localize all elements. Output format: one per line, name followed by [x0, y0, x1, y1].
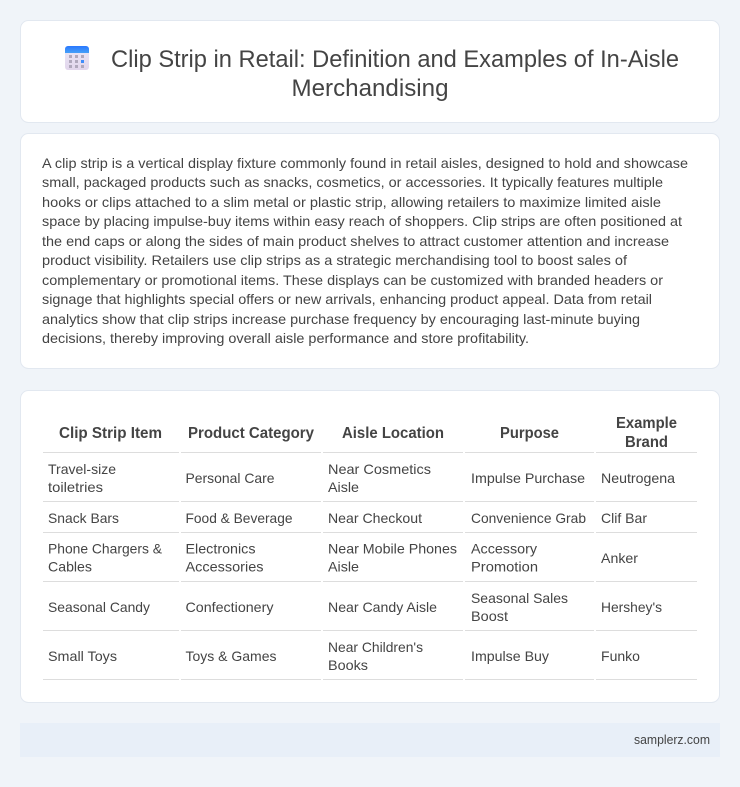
table row: seasonal candy: Confectionery [186, 599, 274, 615]
table row: small toys: Funko [601, 648, 640, 664]
table row: travel-size toiletries: Travel-size [48, 461, 116, 477]
table header row: Example [616, 415, 677, 432]
text block: description paragraph: analytics show that clip strips increase purchase frequency by encouraging last-minute buying [42, 311, 640, 327]
table row: travel-size toiletries: Impulse Purchase [471, 470, 585, 486]
footer text: samplerz.com [634, 733, 710, 747]
table row: seasonal candy: Boost [471, 608, 508, 624]
panel: title header [20, 20, 720, 122]
table row: seasonal candy: Hershey's [601, 599, 662, 615]
table row: small toys: Books [328, 657, 368, 673]
title [111, 46, 679, 102]
table row: phone chargers: Near Mobile Phones [328, 540, 457, 556]
table row: phone chargers: Electronics [186, 540, 256, 556]
text block: description paragraph: the end caps or along the sides of main product shelves to attract customer attention and increase [42, 233, 669, 249]
table row: snack bars: Food & Beverage [186, 510, 293, 526]
title: Clip Strip in Retail: Definition and Examples of In-Aisle [111, 46, 679, 73]
table row: small toys: Impulse Buy [471, 648, 549, 664]
table row: seasonal candy [48, 590, 662, 624]
table row: phone chargers: Cables [48, 558, 92, 574]
text block: description paragraph: decisions, thereby improving overall aisle performance and store profitability. [42, 330, 529, 346]
table row: seasonal candy: Near Candy Aisle [328, 599, 437, 615]
text block: description paragraph: product visibility. Retailers use clip strips as a strategic merchandising tool to boost sales of [42, 252, 627, 268]
table header row: Product Category [188, 425, 314, 442]
table row: phone chargers [48, 540, 638, 574]
table row: snack bars: Near Checkout [328, 510, 422, 526]
text block: description paragraph: space by placing impulse-buy items within easy reach of shoppers. Clip strips are often positioned at [42, 213, 682, 229]
table row: small toys: Near Children's [328, 639, 423, 655]
table row: phone chargers: Accessory [471, 540, 537, 556]
table row: phone chargers: Aisle [328, 558, 359, 574]
table row: phone chargers: Phone Chargers & [48, 540, 163, 556]
table header row: Purpose [500, 425, 559, 442]
table row: phone chargers: Accessories [186, 558, 264, 574]
table row: phone chargers: Promotion [471, 558, 538, 574]
table row: travel-size toiletries: toiletries [48, 479, 103, 495]
table row: small toys [48, 639, 640, 673]
table row: travel-size toiletries: Aisle [328, 479, 359, 495]
panel: table card [20, 390, 720, 702]
title: Merchandising [292, 75, 448, 102]
table row: small toys: Small Toys [48, 648, 117, 664]
table header row: Brand [625, 434, 668, 451]
footer bar [20, 723, 720, 757]
text block: description paragraph [42, 155, 688, 346]
table row: seasonal candy: Seasonal Candy [48, 599, 150, 615]
table row: small toys: Toys & Games [186, 648, 276, 664]
table row: snack bars [48, 510, 647, 526]
table header row: Aisle Location [342, 425, 444, 442]
text block: description paragraph: signage that highlights special offers or new arrivals, enhancing product appeal. Data from retail [42, 291, 652, 307]
panel: description [20, 134, 720, 368]
table row: travel-size toiletries: Near Cosmetics [328, 461, 431, 477]
text block: description paragraph: hooks or clips attached to a slim metal or plastic strip, allowing retailers to maximize limited aisle [42, 194, 661, 210]
icon: calendar [65, 46, 89, 70]
table header row: Clip Strip Item [59, 425, 162, 442]
text block: description paragraph: A clip strip is a vertical display fixture commonly found in retail aisles, designed to hold and showcase [42, 155, 688, 171]
table row: travel-size toiletries: Personal Care [186, 470, 275, 486]
table row: snack bars: Convenience Grab [471, 510, 586, 526]
text block: description paragraph: complementary or promotional items. These displays can be customized with branded headers or [42, 272, 663, 288]
table header row [59, 415, 677, 451]
table row: phone chargers: Anker [601, 550, 638, 566]
table row: snack bars: Clif Bar [601, 510, 647, 526]
text block: description paragraph: small, packaged products such as snacks, cosmetics, or accessories. It typically features multiple [42, 174, 663, 190]
table row: travel-size toiletries [48, 461, 675, 495]
table row: travel-size toiletries: Neutrogena [601, 470, 675, 486]
table row: snack bars: Snack Bars [48, 510, 119, 526]
table row: seasonal candy: Seasonal Sales [471, 590, 568, 606]
